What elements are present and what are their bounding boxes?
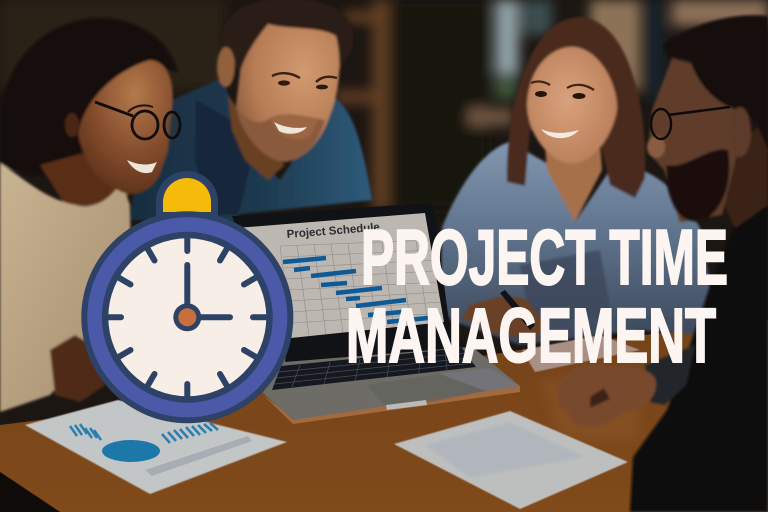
sleeve: [645, 345, 695, 405]
ear: [217, 47, 235, 87]
gantt chart bars: [283, 258, 428, 322]
paper under hand: [522, 335, 640, 372]
hand: [557, 364, 656, 427]
hour ticks: [108, 238, 266, 397]
stopwatch face: [108, 238, 266, 396]
stopwatch crown: [156, 171, 218, 220]
person: woman with blue shirt: [441, 17, 712, 372]
clock hands: [187, 265, 230, 317]
laptop screen title: Project Schedule: [286, 222, 380, 241]
body: [630, 200, 768, 512]
ear: [65, 113, 79, 137]
face: [648, 58, 738, 222]
neck: [722, 120, 768, 228]
hair: [0, 18, 178, 175]
center pin: [173, 303, 201, 331]
arm and hand: [462, 295, 545, 340]
shirt: [441, 142, 712, 345]
face: [78, 60, 173, 194]
neck: [40, 150, 130, 205]
pie chart: [102, 440, 160, 462]
paper: table sheet: [394, 411, 628, 509]
person: man in denim shirt: [130, 0, 372, 222]
sweater: [0, 163, 132, 412]
mini bars: [70, 423, 218, 443]
hair: [221, 0, 353, 72]
laptop: [232, 203, 520, 424]
beard: [666, 149, 729, 221]
hair: [663, 15, 768, 150]
laptop screen bezel: [232, 203, 470, 362]
person: man with beard on right: [557, 15, 768, 512]
hand: [50, 335, 105, 402]
shirt: [130, 78, 372, 222]
neck: [228, 95, 285, 180]
wooden table: [0, 320, 768, 512]
ear: [729, 107, 751, 157]
laptop screen: [236, 213, 444, 338]
neck: [545, 145, 602, 222]
paper: chart report: [25, 400, 287, 494]
person: woman on left: [0, 18, 180, 412]
hair: [507, 17, 645, 198]
stopwatch case: [81, 211, 293, 423]
stopwatch icon: [81, 171, 293, 423]
glasses: [95, 102, 180, 139]
face: [236, 24, 339, 162]
glasses: [651, 107, 730, 139]
laptop base: [263, 386, 520, 424]
keyboard: [272, 348, 476, 390]
stubble: [236, 105, 325, 162]
face: [527, 47, 617, 164]
